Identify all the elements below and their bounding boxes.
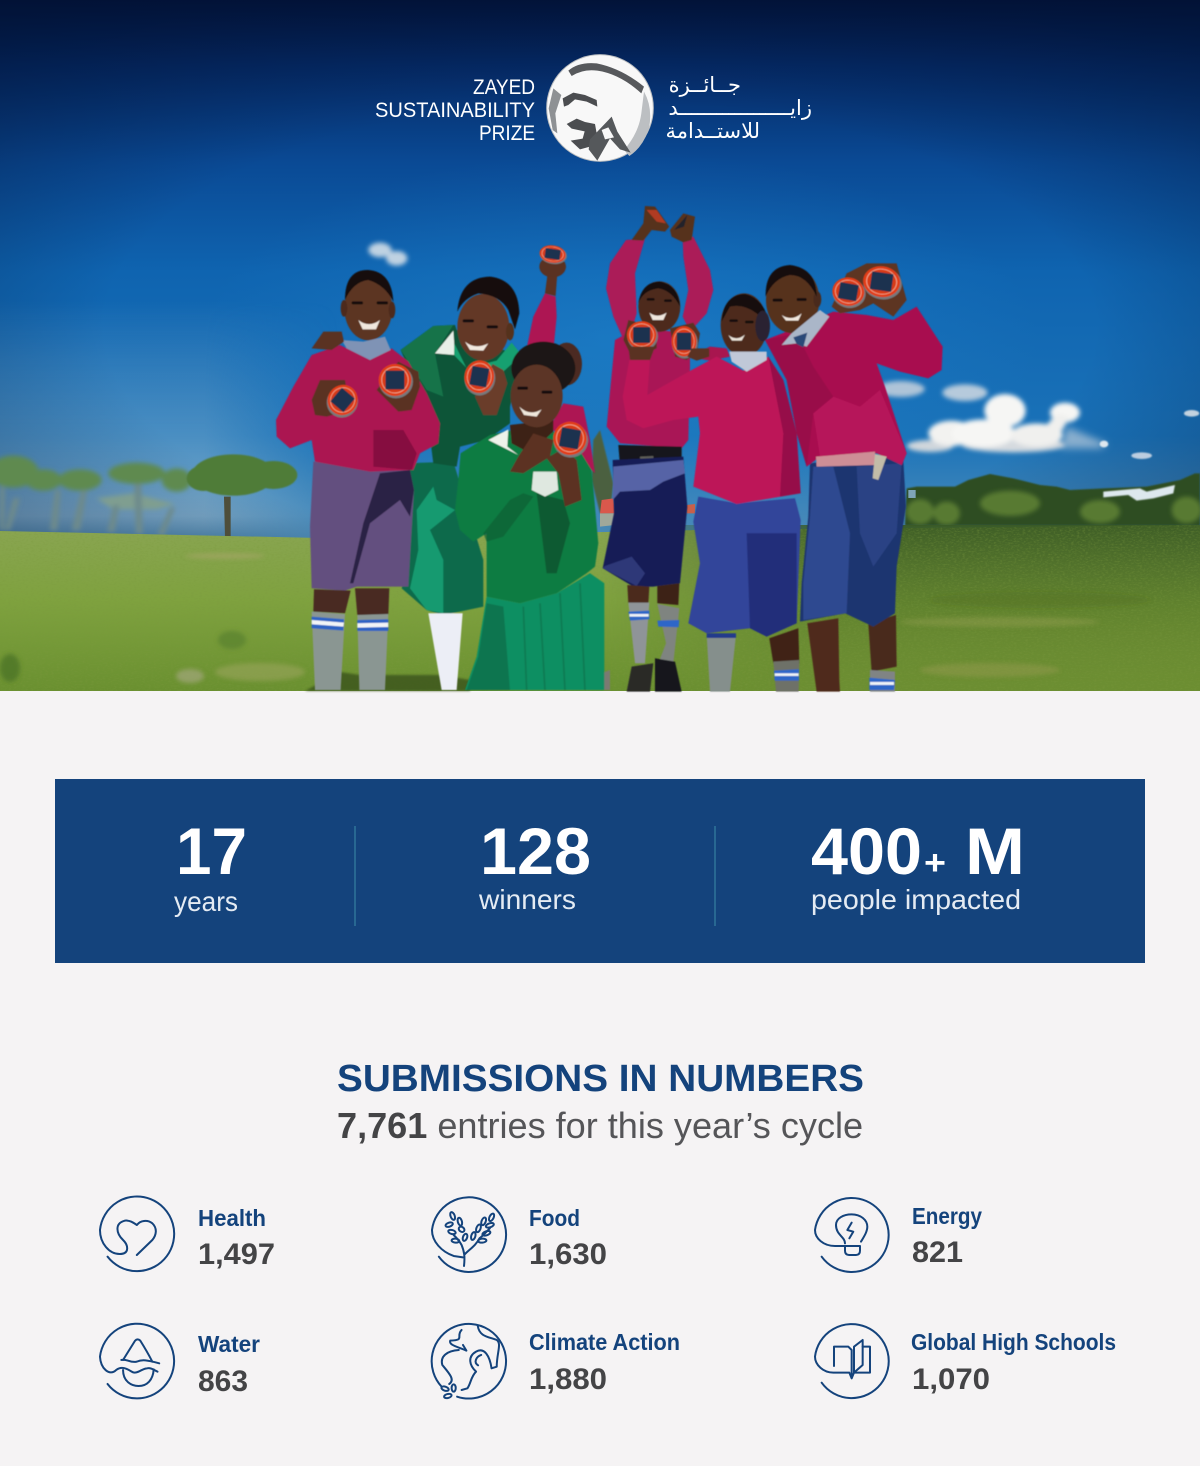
stat: winners: 128: [480, 814, 591, 888]
category: energy: Energy: [912, 1203, 982, 1229]
logo: Arabic wordmark: [665, 74, 812, 143]
clouds on right: [877, 381, 1199, 459]
icon: light bulb: [815, 1198, 889, 1272]
stat: people impacted: people impacted: [811, 884, 1021, 915]
logo: [375, 55, 812, 161]
students group: [276, 206, 943, 692]
grass field: [0, 525, 1200, 691]
student: jumping boy: [603, 206, 713, 692]
student: boy behind with raised arm: [527, 244, 595, 473]
grass shadows: [305, 672, 470, 691]
solar light: [462, 358, 498, 398]
solar lights: [320, 379, 365, 424]
category: energy: [815, 1198, 982, 1272]
category: global high schools: Global High Schools: [911, 1329, 1116, 1355]
stat: years: [174, 814, 247, 917]
bushes on right: [905, 473, 1200, 526]
stat: years: years: [174, 886, 238, 917]
stats banner: [55, 779, 1145, 963]
stat: people impacted: 400: [811, 814, 922, 888]
student: right boy: [765, 263, 943, 692]
woman's hand on shoulder: [312, 332, 344, 350]
student: left boy: [276, 270, 440, 690]
banner background: [55, 779, 1145, 963]
solar lights: [627, 321, 658, 351]
logo: English wordmark: PRIZE: [479, 122, 535, 145]
icon: wheat: [432, 1197, 506, 1272]
stat: people impacted: +: [924, 844, 946, 882]
sky: [0, 0, 1200, 545]
student: woman in green: [401, 277, 522, 690]
subheading: 7,761 entries for this year’s cycle: [337, 1105, 863, 1146]
logo: Arabic wordmark: زايــــــــــــــــــد: [668, 97, 812, 120]
school crest: [532, 472, 558, 497]
category: global high schools: [815, 1324, 1116, 1398]
cloud above left boy: [368, 243, 407, 266]
logo: English wordmark: [375, 76, 535, 145]
category: food: Food: [529, 1205, 580, 1231]
category: water: Water: [198, 1331, 260, 1357]
category: climate action: Climate Action: [529, 1329, 680, 1355]
logo: English wordmark: ZAYED: [473, 76, 535, 99]
trees on left: [0, 454, 297, 537]
solar lights: [830, 275, 868, 311]
category: health: [100, 1196, 275, 1271]
category: food: [432, 1197, 607, 1272]
hero photo: students holding solar lights: [0, 0, 1200, 692]
solar light: [550, 419, 591, 460]
category: health: 1,497: [198, 1238, 275, 1271]
category: water: 863: [198, 1365, 248, 1398]
icon: water drop: [100, 1324, 174, 1398]
heading: SUBMISSIONS IN NUMBERS: [337, 1058, 864, 1100]
distant red roof and tree behind group: [592, 430, 695, 527]
category: energy: 821: [912, 1236, 963, 1269]
stat: years: 17: [176, 814, 247, 888]
clouds: [368, 243, 1199, 459]
category: food: 1,630: [529, 1238, 607, 1271]
logo: Arabic wordmark: جــائــزة: [669, 74, 741, 97]
category: climate action: [432, 1324, 680, 1399]
solar light: [538, 244, 568, 266]
logo: portrait medallion: [547, 55, 653, 161]
student: middle boy: [623, 293, 801, 692]
icon: open book: [815, 1324, 889, 1398]
stat: winners: winners: [478, 884, 576, 915]
logo: Arabic wordmark: للاستــدامة: [665, 120, 760, 143]
icon: heart: [100, 1196, 174, 1271]
stat: people impacted: [811, 814, 1025, 915]
heading: [337, 1058, 864, 1146]
category: water: [100, 1324, 260, 1398]
category: global high schools: 1,070: [912, 1363, 990, 1396]
stat: people impacted: M: [965, 814, 1025, 888]
icon: globe with leaves: [432, 1324, 506, 1399]
category: health: Health: [198, 1205, 266, 1231]
category: climate action: 1,880: [529, 1363, 607, 1396]
logo: English wordmark: SUSTAINABILITY: [375, 99, 535, 122]
student: kneeling girl: [455, 342, 610, 690]
